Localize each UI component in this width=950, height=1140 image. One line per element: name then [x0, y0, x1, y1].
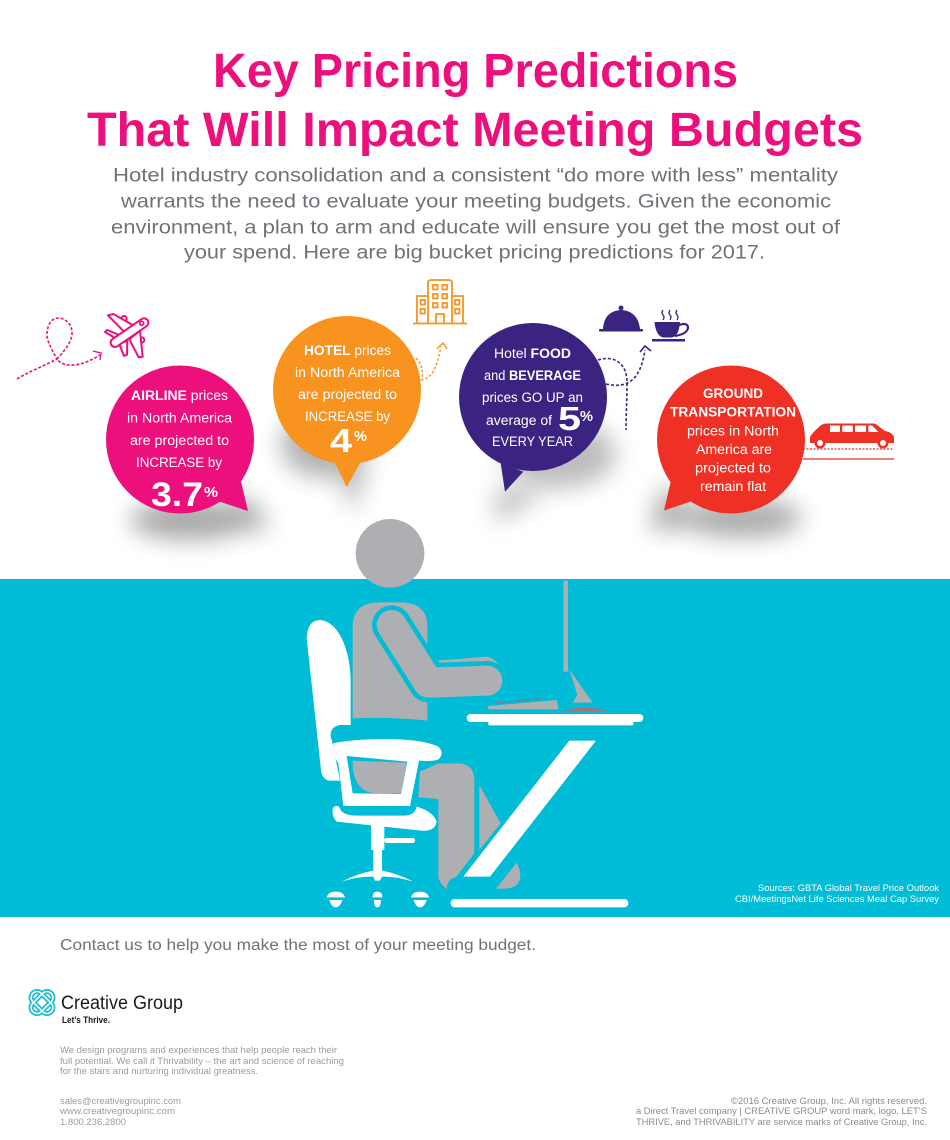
- intro text: [111, 164, 841, 264]
- bubble: airline: [106, 366, 254, 514]
- person body: [353, 602, 520, 889]
- text: airline prediction: %: [204, 484, 218, 501]
- icon: food cloche: [599, 306, 643, 332]
- title: Key Pricing Predictions: [213, 45, 738, 98]
- panel: airline bubble: [106, 366, 272, 540]
- shadow: hotel bubble: [281, 410, 369, 514]
- icon: airplane with dashed path: [17, 314, 144, 379]
- text: ground prediction: projected to: [695, 460, 771, 476]
- logo: Creative Group: [29, 989, 183, 1026]
- panel: hotel bubble: [273, 316, 421, 514]
- contact details: www.creativegroupinc.com: [59, 1106, 175, 1116]
- text: airline prediction: 3.7: [151, 476, 203, 514]
- text: ground prediction: TRANSPORTATION: [670, 404, 796, 420]
- contact call to action: Contact us to help you make the most of your meeting budget.: [60, 937, 536, 954]
- logo: Creative Group: Let’s Thrive.: [62, 1015, 110, 1026]
- person head: [356, 519, 424, 588]
- bubble: hotel: [273, 316, 421, 487]
- arrow: purple dashed path: [598, 346, 651, 430]
- arrow: orange dashed path: [416, 343, 447, 380]
- text: airline prediction: [127, 388, 233, 514]
- shadow: airline bubble: [130, 490, 272, 540]
- text: food prediction: [482, 346, 593, 449]
- text: hotel prediction: 4: [330, 422, 353, 459]
- computer and keyboard: [488, 581, 607, 711]
- person arm: [392, 625, 487, 683]
- copyright notice: [636, 1096, 927, 1127]
- text: ground prediction: GROUND: [703, 386, 763, 401]
- text: ground prediction: prices in North: [687, 424, 779, 438]
- panel: ground transportation bubble: [648, 366, 805, 538]
- text: hotel prediction: HOTEL prices: [304, 343, 391, 358]
- company description: for the stars and nurturing individual greatness.: [60, 1066, 258, 1076]
- text: food prediction: average of: [486, 413, 552, 428]
- company description: full potential. We call it Thrivability – the art and science of reaching: [60, 1056, 344, 1066]
- company description: We design programs and experiences that help people reach their: [60, 1045, 337, 1055]
- intro text: environment, a plan to arm and educate will ensure you get the most out of: [111, 216, 841, 238]
- text: food prediction: 5: [558, 400, 581, 437]
- text: airline prediction: AIRLINE prices: [131, 388, 228, 403]
- desk: [447, 714, 643, 907]
- icon: coffee cup: [652, 310, 688, 342]
- copyright notice: a Direct Travel company | CREATIVE GROUP word mark, logo, LET’S: [636, 1106, 927, 1116]
- text: food prediction: EVERY YEAR: [492, 434, 573, 449]
- copyright notice: ©2016 Creative Group, Inc. All rights reserved.: [731, 1096, 927, 1106]
- contact details: sales@creativegroupinc.com: [60, 1096, 181, 1106]
- text: ground prediction: America are: [696, 442, 772, 457]
- panel: food and beverage bubble: [459, 323, 616, 524]
- intro text: Hotel industry consolidation and a consistent “do more with less” mentality: [113, 164, 838, 186]
- contact details: 1.800.236.2800: [60, 1117, 126, 1127]
- copyright notice: THRIVE, and THRIVABILITY are service marks of Creative Group, Inc.: [636, 1117, 927, 1127]
- contact details: [59, 1096, 181, 1127]
- text: airline prediction: in North America: [127, 410, 233, 426]
- illustration: person at desk: [307, 519, 643, 907]
- text: airline prediction: are projected to: [130, 433, 229, 448]
- text: ground prediction: [670, 386, 796, 494]
- text: hotel prediction: in North America: [295, 365, 401, 380]
- chair: [307, 620, 442, 907]
- icon: hotel building: [413, 280, 467, 324]
- sources note: Sources: GBTA Global Travel Price Outlook: [758, 883, 939, 893]
- text: hotel prediction: [295, 343, 401, 459]
- title: [87, 45, 863, 157]
- bubble: food and beverage: [459, 323, 607, 492]
- intro text: warrants the need to evaluate your meeting budgets. Given the economic: [120, 190, 831, 212]
- logo: Creative Group: Creative Group: [61, 993, 183, 1014]
- company description: [60, 1045, 344, 1076]
- text: food prediction: prices GO UP an: [482, 390, 583, 405]
- shadow: food bubble: [493, 420, 616, 524]
- text: hotel prediction: INCREASE by: [305, 409, 390, 424]
- text: ground prediction: remain flat: [700, 479, 766, 494]
- text: airline prediction: INCREASE by: [136, 455, 222, 470]
- text: hotel prediction: are projected to: [298, 387, 397, 402]
- text: hotel prediction: %: [354, 428, 367, 445]
- sources note: [735, 883, 939, 904]
- title: That Will Impact Meeting Budgets: [87, 104, 863, 157]
- icon: limousine: [803, 424, 894, 459]
- text: food prediction: and BEVERAGE: [484, 368, 581, 383]
- intro text: your spend. Here are big bucket pricing predictions for 2017.: [184, 242, 765, 264]
- bubble: ground transportation: [657, 366, 805, 514]
- shadow: ground bubble: [648, 482, 802, 538]
- text: food prediction: Hotel FOOD: [494, 346, 571, 361]
- text: food prediction: %: [580, 408, 593, 425]
- sources note: CBI/MeetingsNet Life Sciences Meal Cap Survey: [735, 894, 939, 904]
- logo mark: [29, 989, 55, 1016]
- panel: teal band: [0, 579, 950, 917]
